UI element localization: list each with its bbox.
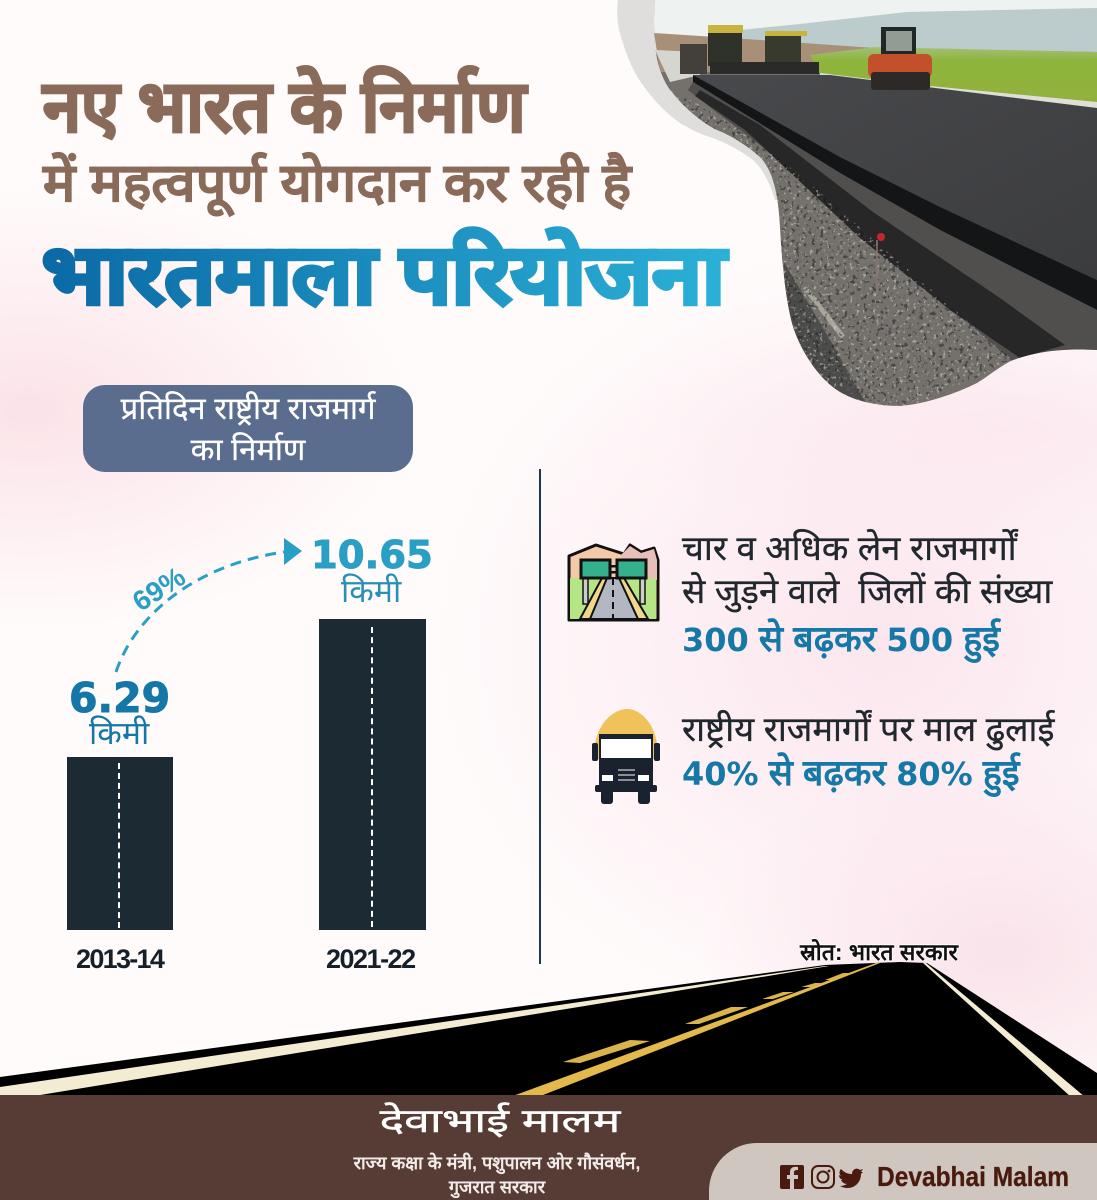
paver machine 1 <box>708 25 764 74</box>
stat: highway icon and text <box>568 528 1053 663</box>
icon: highway with signboards <box>568 543 660 622</box>
year 2021-22: 2021-22 <box>326 944 415 974</box>
road roller <box>868 27 932 90</box>
growth arrow with 69% <box>114 538 302 672</box>
text: 300 to 500: 300 से बढ़कर 500 हुई <box>682 618 1000 659</box>
minister name: देवाभाई मालम <box>380 1102 620 1139</box>
unit km right: किमी <box>341 573 401 609</box>
photo: road under construction <box>617 0 1097 406</box>
pill heading: का निर्माण <box>191 432 305 467</box>
social handle: Devabhai Malam <box>877 1161 1069 1192</box>
bar 2013-14 <box>67 757 173 930</box>
title line 2: में महत्वपूर्ण योगदान कर रही है <box>43 154 631 213</box>
bar chart <box>67 533 433 974</box>
minister role line 2: गुजरात सरकार <box>449 1177 545 1197</box>
stat: truck icon and text <box>592 709 1056 804</box>
red flag <box>877 233 885 294</box>
pill heading: प्रतिदिन राष्ट्रीय राजमार्ग <box>121 391 375 426</box>
title line 3: project name: भारतमाला परियोजना <box>42 227 728 321</box>
pill heading <box>83 385 413 472</box>
minister role line 1: राज्य कक्षा के मंत्री, पशुपालन ओर गौसंवर्धन, <box>354 1153 640 1173</box>
value 6.29: 6.29 <box>69 674 170 722</box>
paver machine 2 <box>764 31 819 74</box>
grey border of photo <box>617 0 800 200</box>
text: freight on national highways: राष्ट्रीय राजमार्गों पर माल ढुलाई <box>682 711 1054 749</box>
text: 40 to 80 percent: 40% से बढ़कर 80% हुई <box>682 752 1020 793</box>
title line 1: नए भारत के निर्माण <box>43 68 526 147</box>
photo scene <box>640 0 1097 420</box>
social icons <box>780 1165 863 1189</box>
small grey machine <box>680 44 707 74</box>
social tab <box>709 1143 1097 1200</box>
value 10.65: 10.65 <box>311 533 433 578</box>
divider <box>539 469 541 964</box>
year 2013-14: 2013-14 <box>76 944 163 974</box>
text: four lane highways: चार व अधिक लेन राजमार्गों <box>682 530 1017 568</box>
text: connected districts: से जुड़ने वाले जिलों की संख्या <box>682 573 1052 611</box>
footer band <box>0 1095 1097 1200</box>
icon: truck <box>592 709 660 804</box>
growth arrow with 69%: 69% <box>127 561 191 617</box>
unit km left: किमी <box>89 715 149 751</box>
source note: स्रोत: भारत सरकार <box>800 939 958 965</box>
bar 2021-22 <box>319 619 426 930</box>
